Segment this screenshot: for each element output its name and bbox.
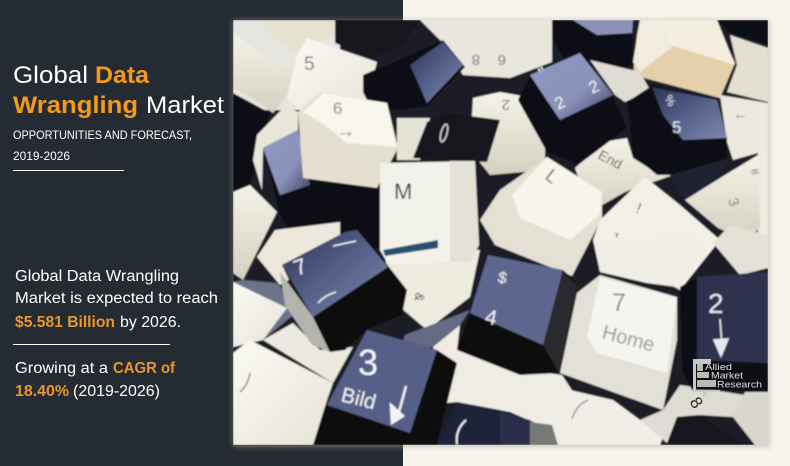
photo: pile of keyboard keys: [233, 0, 768, 445]
text: Growing at a: Growing at a: [15, 360, 108, 377]
logo text: Market: Market: [711, 370, 743, 382]
subtitle line 2: 2019-2026: [13, 151, 70, 163]
key top face: [587, 277, 677, 373]
key: 6 with arrow: [298, 92, 398, 188]
title: [13, 62, 224, 119]
logo: Allied Market Research: [693, 359, 762, 399]
key: M: [380, 161, 479, 264]
key: dark bottom: [437, 402, 552, 445]
pale gap near End: [590, 60, 650, 102]
title: Market: Market: [146, 92, 224, 119]
key: white left: [233, 282, 287, 347]
text: by 2026.: by 2026.: [120, 314, 181, 331]
text line 1: Global Data Wrangling: [15, 268, 179, 285]
title: Global: Global: [13, 62, 88, 89]
pale backdrop top left: [233, 20, 340, 110]
text line 2: Market is expected to reach: [15, 290, 218, 307]
key legend: 2: 2: [552, 92, 568, 114]
key legend: 7: 7: [290, 253, 310, 281]
key: Home: [560, 275, 677, 410]
key legend: 5: 5: [672, 118, 681, 137]
key legend: 8: 8: [472, 51, 480, 68]
key legend: L: L: [541, 165, 562, 188]
key: above Home: [593, 230, 713, 287]
key: white under 3: [263, 323, 353, 383]
key legend: Home: Home: [600, 322, 657, 357]
key: bottom white: [540, 390, 663, 445]
key legend: 4: 4: [483, 305, 499, 330]
key: right sliver: [758, 150, 768, 240]
key: dollar 4: [457, 255, 577, 375]
key: dark body under ampersand 6: [263, 130, 385, 250]
photo base: [233, 20, 768, 445]
key legend: curve: [572, 400, 588, 419]
key: white between 6 and 0: [397, 118, 430, 160]
key legend: arrow: →: [336, 121, 355, 142]
dark left panel: [0, 0, 403, 466]
key: left white lower: [233, 185, 277, 280]
key: tilted dark: [363, 40, 465, 112]
key: 3 hash: [685, 155, 763, 240]
key: pale behind ampersand: [253, 106, 298, 190]
key: right white with 2: [470, 92, 545, 175]
key: gray stub: [530, 422, 558, 445]
key: right top white: [713, 225, 768, 275]
key legend: 5: 5: [304, 54, 315, 75]
key: ampersand 6 face: [262, 130, 311, 196]
key top face: [303, 93, 397, 147]
legend: 8 near logo: 8: [686, 393, 707, 412]
key top face: [512, 157, 602, 240]
dark gap below % key: [670, 158, 730, 205]
logo bars: [697, 364, 716, 387]
floor: gray blue: [233, 279, 292, 339]
key shadow streak: [383, 240, 438, 256]
key: lower right white: [640, 385, 745, 443]
key top face: [327, 330, 437, 433]
key legend: 0: [439, 124, 449, 142]
key: top left: [260, 20, 335, 53]
key: front left: [233, 340, 333, 445]
growth text: [15, 360, 176, 400]
key: 3 Bild: [313, 330, 457, 445]
floor: gray blue centre: [400, 310, 470, 350]
key legend: ampersand: &: [411, 291, 428, 303]
key legend: 2: 2: [502, 96, 510, 113]
value: 18.40%: 18.40%: [15, 383, 69, 400]
key top face: [697, 272, 768, 363]
key: top centre dark: [335, 20, 420, 58]
market size text: [15, 268, 218, 331]
key top face: [663, 20, 735, 65]
key: left white: [233, 33, 292, 113]
key legend: 2: 2: [708, 288, 724, 319]
key: ampersand lower white: [385, 250, 480, 330]
subtitle line 1: OPPORTUNITIES AND FORECAST,: [13, 130, 192, 142]
key: bottom dark right: [667, 415, 743, 445]
key top left: [633, 20, 672, 72]
key side: [280, 272, 330, 352]
key: top right black: [717, 20, 768, 45]
key top face: [410, 42, 463, 103]
key legend: dollar: $: [496, 269, 509, 288]
key legend: Bild: Bild: [339, 384, 378, 414]
logo text: Research: Research: [717, 380, 762, 390]
key: tan: [633, 20, 735, 98]
key legend: 6: 6: [333, 99, 342, 118]
key legend: slash: [333, 241, 356, 246]
key legend: down arrow: [714, 319, 728, 356]
key top face: [573, 20, 633, 35]
key: left dark: [233, 93, 270, 192]
key legend: exclamation: !: [634, 200, 644, 217]
key: gray bottom: [500, 412, 552, 445]
key: 2 down arrow: [680, 272, 768, 392]
key legend: hash: #: [747, 166, 763, 178]
logo icon: [693, 359, 720, 399]
title: Wrangling: Wrangling: [13, 92, 138, 119]
key top face: [652, 87, 727, 140]
value: $5.581 Billion: $5.581 Billion: [15, 314, 115, 331]
photo drop shadow: [233, 20, 770, 447]
key: white centre below dollar key: [433, 325, 575, 425]
key legend: quote: ": [535, 63, 549, 84]
key legend: 2: 2: [586, 76, 602, 98]
key legend: 6: 6: [498, 51, 506, 68]
key legend: down arrow: [391, 386, 406, 423]
key legend: %: %: [661, 92, 679, 109]
key: right with arrow: [720, 95, 768, 160]
key: 7 backing me: [257, 0, 340, 285]
key legend: M: M: [394, 179, 412, 204]
subtitle: [13, 130, 192, 163]
key side: [543, 273, 577, 373]
key: End: [575, 138, 673, 212]
key: top dark: [552, 20, 633, 70]
key legend: 3: 3: [725, 196, 743, 209]
key: bottom right white: [733, 392, 768, 445]
key: % 5 dark: [627, 85, 727, 175]
key legend: curve: [240, 373, 250, 392]
text: period: (2019-2026): [73, 383, 160, 400]
value: CAGR of: CAGR of: [113, 360, 176, 377]
key: 5: [287, 38, 377, 115]
key: arrow legend on right: ←: [733, 106, 748, 123]
key: top centre white with 8 and 6: [420, 20, 552, 78]
key legend: 1: 1: [610, 229, 622, 245]
key: 7: [280, 226, 407, 352]
key top face: [282, 230, 388, 317]
logo text: Allied: Allied: [705, 362, 732, 373]
key: 2 2 dark: [518, 53, 627, 165]
key side shade: [450, 161, 479, 262]
key legend: paren: [457, 420, 466, 444]
key legend: 7: 7: [612, 289, 626, 317]
key: exclamation 1: [593, 177, 720, 290]
key top face: [470, 255, 563, 345]
key legend: End: End: [596, 147, 625, 172]
key: right white upper: [727, 35, 768, 102]
key legend: 3: 3: [358, 342, 378, 383]
key: black with 0: [413, 113, 500, 162]
key legend: slash: [318, 292, 336, 303]
key top face: [530, 53, 613, 120]
key: L: [480, 157, 602, 276]
key legend: 6: 6: [317, 107, 328, 125]
title: Data: Data: [95, 62, 150, 89]
